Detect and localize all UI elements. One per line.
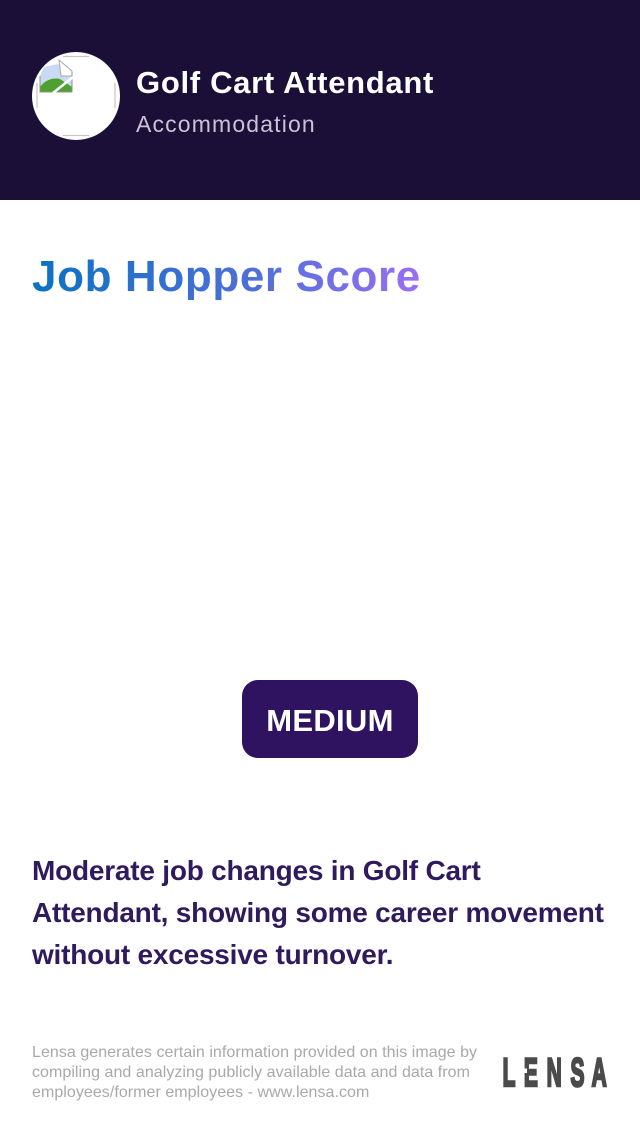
job category: Accommodation — [136, 111, 316, 137]
icon: avatar circle with broken image — [32, 52, 120, 140]
description text — [32, 855, 604, 970]
description text: Moderate job changes in Golf Cart — [32, 855, 481, 886]
score badge: MEDIUM — [242, 680, 418, 758]
logo: LENSA: LENSA — [503, 1050, 607, 1094]
header band — [0, 0, 640, 200]
score badge: MEDIUM: MEDIUM — [266, 703, 394, 738]
job title: Golf Cart Attendant — [136, 65, 434, 100]
heading: Job Hopper Score: Job Hopper Score — [32, 252, 421, 301]
disclaimer text: employees/former employees - www.lensa.com — [32, 1084, 369, 1101]
disclaimer text: compiling and analyzing publicly available data and data from — [32, 1064, 470, 1081]
disclaimer text: Lensa generates certain information provided on this image by — [32, 1044, 477, 1061]
description text: without excessive turnover. — [32, 939, 393, 970]
description text: Attendant, showing some career movement — [32, 897, 604, 928]
disclaimer text — [32, 1044, 477, 1101]
